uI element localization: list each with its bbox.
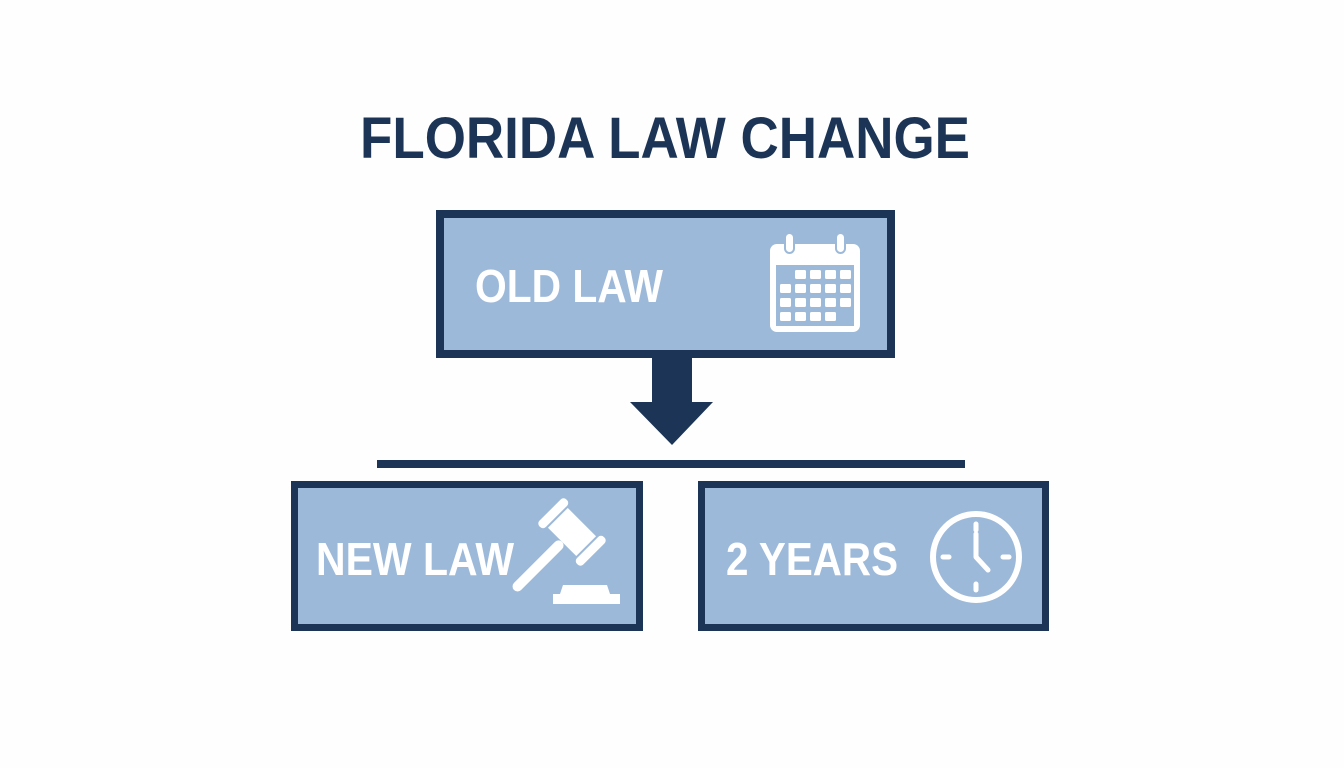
connector line bbox=[377, 460, 965, 468]
title: FLORIDA LAW CHANGE bbox=[360, 106, 970, 171]
icon: clock bbox=[933, 514, 1019, 600]
arrow bbox=[630, 358, 713, 445]
icon: gavel bbox=[492, 497, 620, 612]
panel: old law bbox=[440, 214, 891, 354]
text: old law: OLD LAW bbox=[475, 260, 664, 312]
text: 2 years: 2 YEARS bbox=[726, 533, 898, 585]
panel: new law bbox=[294, 484, 640, 628]
text: new law: NEW LAW bbox=[316, 533, 515, 585]
icon: calendar bbox=[770, 233, 860, 332]
panel: 2 years bbox=[702, 484, 1046, 628]
